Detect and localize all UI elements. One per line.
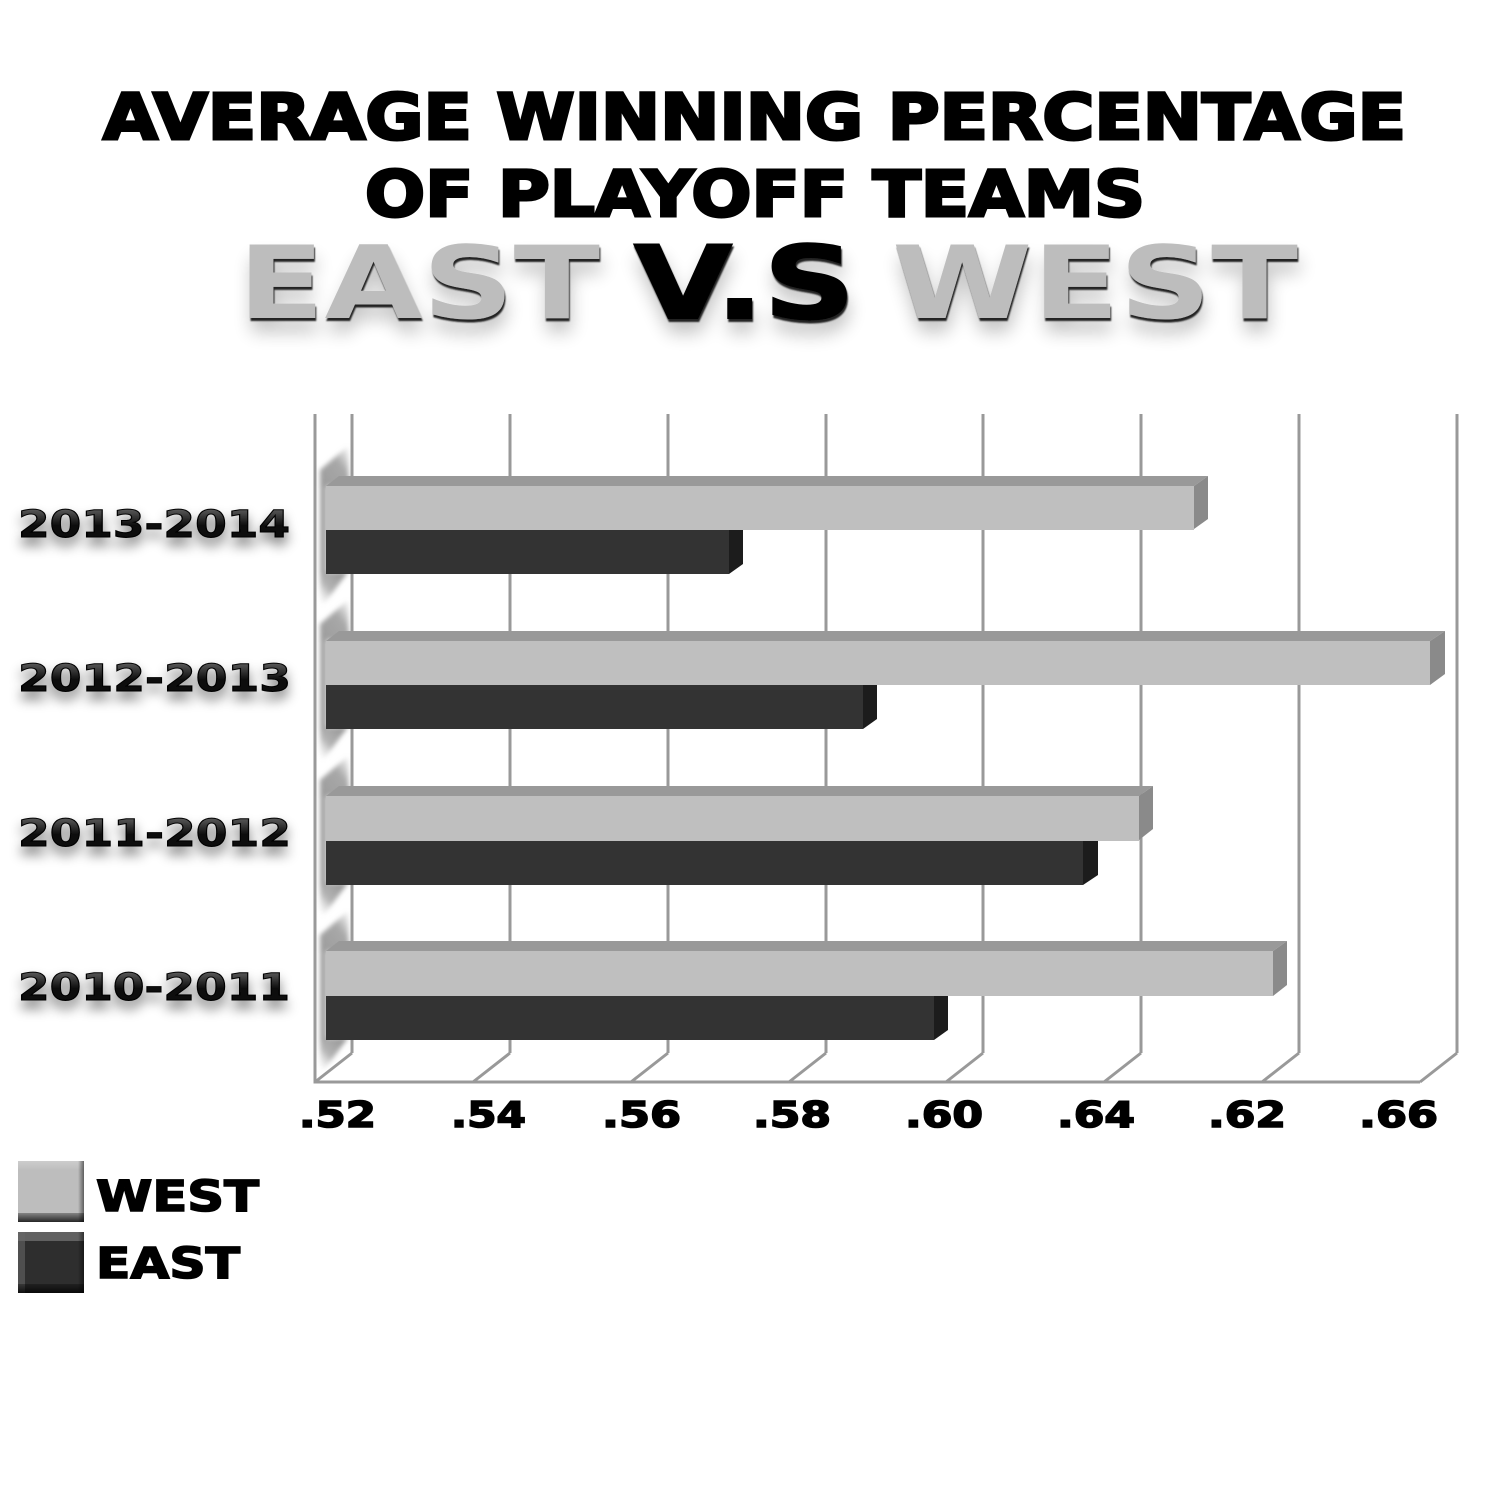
- title: AVERAGE WINNING PERCENTAGE: [103, 81, 1406, 154]
- x axis labels: .62: [1208, 1095, 1286, 1136]
- x axis labels: .52: [299, 1095, 376, 1136]
- category labels: 2013-2014: [18, 503, 290, 546]
- x axis labels: .60: [905, 1095, 983, 1136]
- category labels: 2010-2011: [18, 966, 290, 1009]
- legend label: east: EAST: [96, 1239, 241, 1289]
- chart: winning percentage bars: [315, 414, 1457, 1082]
- x axis labels: .66: [1359, 1095, 1438, 1136]
- bars: 2013-2014: [326, 476, 1208, 574]
- legend: [18, 1161, 260, 1293]
- title: [103, 81, 1406, 231]
- category labels: [18, 503, 291, 1009]
- heading: East v.s West: EAST: [238, 224, 600, 342]
- x axis labels: [299, 1095, 1438, 1136]
- bars: 2012-2013: [326, 631, 1445, 729]
- title: OF PLAYOFF TEAMS: [365, 158, 1145, 231]
- bars: 2010-2011: [326, 941, 1287, 1040]
- legend swatch: west: [18, 1161, 84, 1222]
- heading: East v.s West: WEST: [892, 224, 1298, 342]
- bars: 2011-2012: [326, 786, 1153, 885]
- category labels: 2011-2012: [18, 812, 291, 855]
- x axis labels: .54: [451, 1095, 526, 1136]
- grid lines and axes: [315, 414, 1457, 1082]
- x axis labels: .56: [602, 1095, 681, 1136]
- category labels: 2012-2013: [18, 657, 291, 700]
- legend swatch: east: [18, 1232, 84, 1293]
- x axis labels: .64: [1057, 1095, 1135, 1136]
- heading: East v.s West: [238, 224, 1298, 342]
- heading: East v.s West: V.S: [634, 224, 855, 342]
- wall shading: [320, 446, 349, 1070]
- x axis labels: .58: [753, 1095, 831, 1136]
- legend label: west: WEST: [96, 1172, 260, 1222]
